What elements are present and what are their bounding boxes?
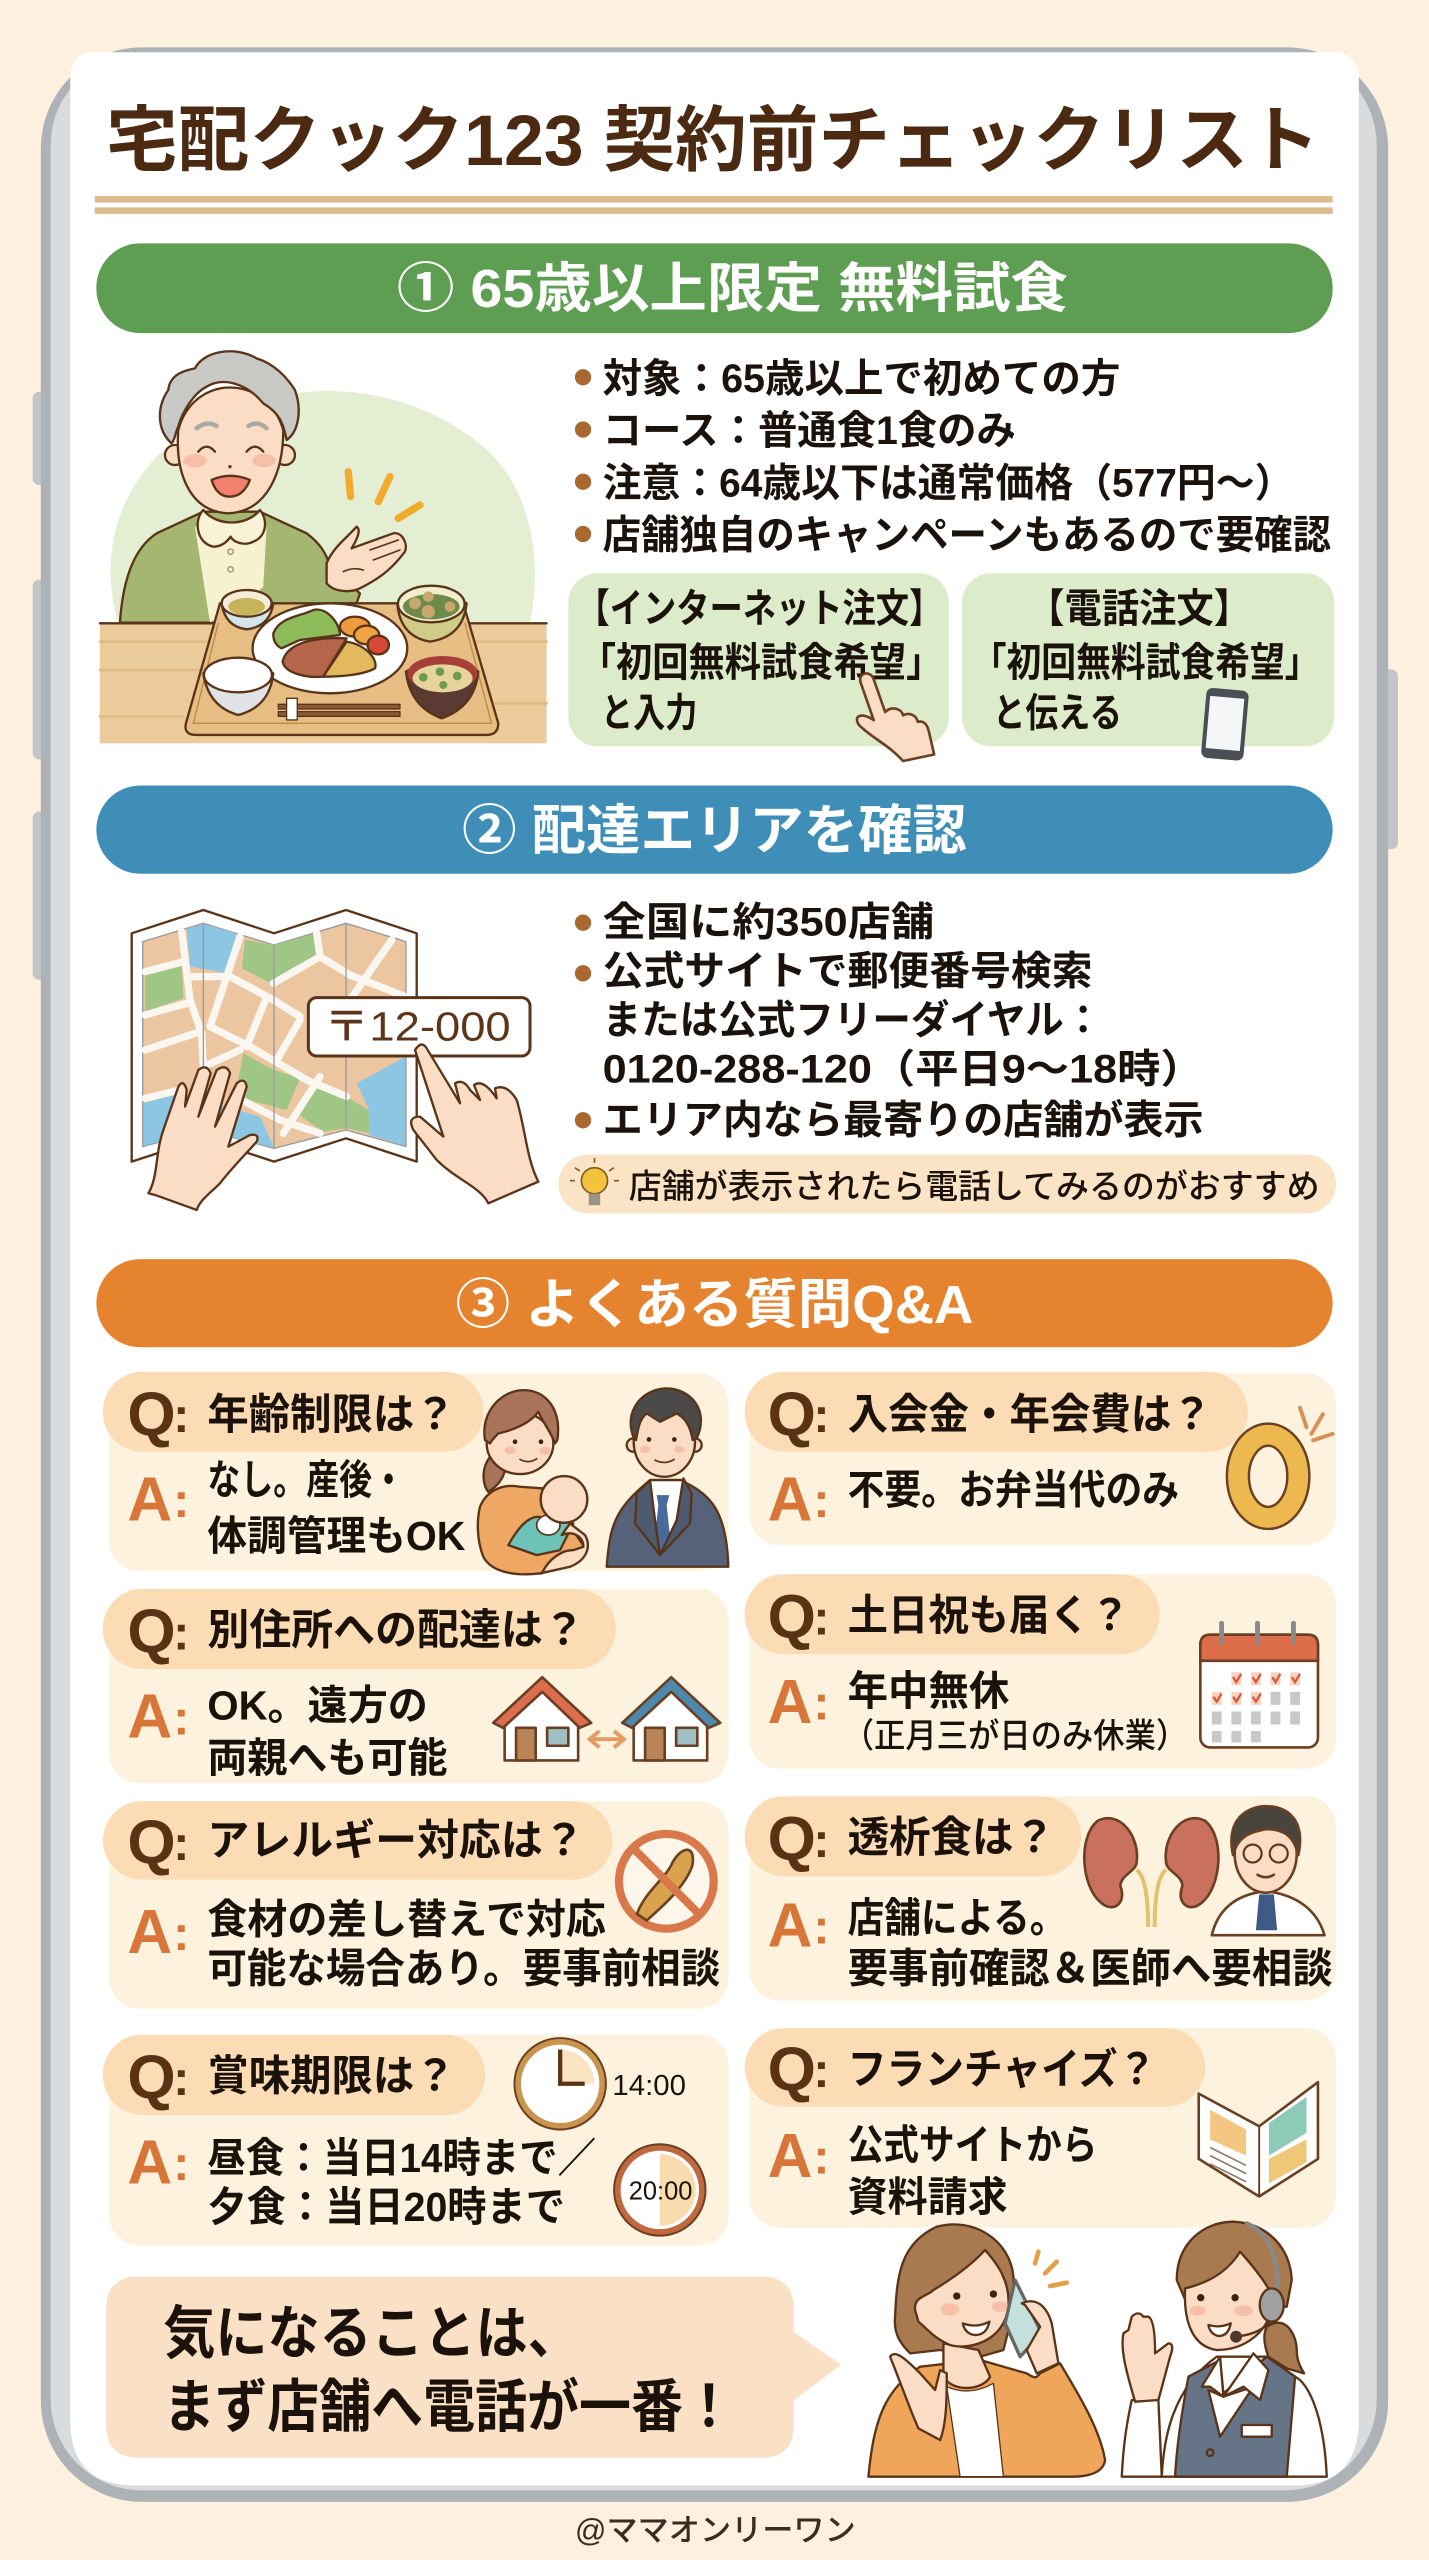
illustration: map with postal code search — [132, 910, 538, 1210]
tip pill: 店舗が表示されたら電話してみるのがおすすめ — [629, 1169, 1320, 1206]
QA card: other address: 両親へも可能 — [207, 1735, 447, 1781]
internet order box: と入力 — [601, 692, 697, 736]
callout speech bubble — [106, 2276, 841, 2458]
QA card: age limit — [103, 1372, 728, 1574]
QA card: weekends: Q — [768, 1583, 816, 1652]
QA card: fees: 入会金・年会費は？ — [848, 1391, 1212, 1438]
icon: light bulb — [570, 1158, 619, 1205]
tip pill — [559, 1155, 1336, 1213]
QA card: weekends: A — [768, 1668, 812, 1737]
phone order box: と伝える — [993, 692, 1122, 736]
section 3 header — [96, 1259, 1333, 1347]
miso soup — [406, 656, 478, 718]
section 1 bullets: 注意：64歳以下は通常価格（577円～） — [603, 461, 1293, 505]
callout speech bubble: 気になることは、 — [163, 2302, 580, 2366]
QA card: allergy — [103, 1801, 728, 2009]
QA card: allergy: Q — [127, 1808, 176, 1877]
map water and parks — [143, 924, 405, 1147]
internet order box: 「初回無料試食希望」 — [580, 641, 942, 685]
footer credit: @ママオンリーワン — [575, 2513, 856, 2548]
phone order box — [962, 573, 1334, 761]
QA card: age limit: Q — [127, 1380, 176, 1449]
QA card: expiry: 昼食：当日14時まで／ — [207, 2135, 596, 2181]
QA card: dialysis: : — [813, 1814, 830, 1868]
chopsticks — [278, 698, 400, 720]
QA card: fees: 不要。お弁当代のみ — [848, 1467, 1179, 1513]
QA card: dialysis: 要事前確認＆医師へ要相談 — [848, 1946, 1333, 1992]
QA card: weekends: : — [813, 1677, 830, 1731]
QA card: other address: : — [173, 1691, 189, 1745]
QA card: other address: 別住所への配達は？ — [207, 1607, 585, 1654]
icon: clock 14:00 — [514, 2038, 686, 2130]
woman — [120, 351, 360, 623]
table — [100, 623, 547, 743]
icon: mother and baby — [478, 1390, 588, 1574]
QA card: franchise: : — [813, 2044, 830, 2098]
QA card: fees: Q — [768, 1380, 816, 1449]
icon: brochure — [1199, 2082, 1318, 2196]
section 1 bullets: コース：普通食1食のみ — [603, 409, 1016, 453]
illustration: call center operator — [1122, 2222, 1327, 2477]
QA card: allergy: : — [173, 1907, 189, 1961]
QA card: fees: A — [768, 1465, 812, 1534]
QA card: weekends — [745, 1574, 1336, 1769]
QA card: franchise: Q — [768, 2035, 816, 2104]
section 3 header: ③ よくある質問Q&A — [456, 1275, 973, 1335]
gesture hand — [327, 527, 406, 591]
QA card: age limit: 体調管理もOK — [207, 1513, 466, 1559]
QA card: dialysis: 透析食は？ — [848, 1814, 1055, 1861]
plate with hamburger — [253, 603, 407, 693]
section 2 header: ② 配達エリアを確認 — [462, 801, 967, 861]
section 2 bullets: 公式サイトで郵便番号検索 — [603, 950, 1093, 994]
QA card: expiry: : — [173, 2052, 189, 2106]
QA card: expiry: 賞味期限は？ — [207, 2052, 456, 2099]
icon: clock 20:00: 20:00 — [629, 2176, 692, 2206]
section 2 header — [96, 786, 1333, 874]
section 1 header: ① 65歳以上限定 無料試食 — [397, 259, 1068, 319]
QA card: weekends: 土日祝も届く？ — [848, 1592, 1130, 1639]
QA card: other address: Q — [127, 1598, 176, 1667]
QA card: weekends: 年中無休 — [848, 1668, 1009, 1714]
icon: calendar — [1200, 1623, 1318, 1747]
QA card: expiry: A — [127, 2128, 172, 2197]
section 1 header — [96, 243, 1333, 333]
QA card: other address: : — [173, 1606, 189, 1660]
postal tag — [308, 998, 530, 1056]
section 2 bullets — [575, 901, 1204, 1142]
green bowl — [397, 586, 467, 642]
QA card: age limit: : — [173, 1474, 189, 1528]
QA card: allergy: A — [127, 1898, 172, 1967]
icon: kidneys — [1084, 1818, 1218, 1927]
QA card: dialysis: : — [813, 1900, 830, 1954]
icon: two houses — [493, 1677, 720, 1760]
right hand — [411, 1045, 538, 1203]
rice bowl — [203, 658, 273, 715]
internet order box: 【インターネット注文】 — [576, 587, 942, 631]
QA card: franchise: : — [813, 2131, 830, 2185]
QA card: allergy: 可能な場合あり。要事前相談 — [207, 1946, 720, 1992]
section 2 bullets: 0120-288-120（平日9～18時） — [603, 1048, 1204, 1092]
QA card: weekends: : — [813, 1592, 830, 1646]
icon: zero — [1238, 1408, 1333, 1518]
callout speech bubble: まず店舗へ電話が一番！ — [163, 2376, 735, 2440]
sparkle — [348, 472, 351, 497]
QA card: age limit: 年齢制限は？ — [207, 1391, 456, 1438]
QA card: other address: A — [127, 1683, 172, 1752]
section 2 bullets: または公式フリーダイヤル： — [603, 999, 1102, 1043]
QA card: expiry: 夕食：当日20時まで — [207, 2184, 565, 2230]
tray — [186, 603, 498, 735]
QA card: age limit: なし。産後・ — [207, 1457, 405, 1503]
QA card: fees: : — [813, 1474, 830, 1528]
QA card: expiry: : — [173, 2137, 189, 2191]
QA card: franchise: 資料請求 — [848, 2174, 1008, 2220]
section 1 bullets: 対象：65歳以上で初めての方 — [603, 357, 1120, 401]
QA card: franchise: 公式サイトから — [848, 2122, 1097, 2168]
icon: clock 20:00 — [614, 2144, 706, 2236]
QA card: other address — [103, 1589, 728, 1783]
QA card: dialysis: 店舗による。 — [848, 1895, 1066, 1941]
QA card: fees — [745, 1372, 1336, 1545]
section 1 bullets: 店舗独自のキャンペーンもあるので要確認 — [603, 514, 1331, 558]
QA card: franchise: A — [768, 2122, 812, 2191]
phone order box: 「初回無料試食希望」 — [972, 641, 1320, 685]
QA card: age limit: A — [127, 1465, 172, 1534]
postal tag: 〒12-000 — [324, 1004, 511, 1050]
icon: doctor — [1212, 1806, 1324, 1935]
section 2 bullets: 全国に約350店舗 — [603, 901, 934, 945]
QA card: weekends: （正月三が日のみ休業） — [843, 1717, 1187, 1755]
internet order box — [568, 573, 949, 761]
illustration: elderly woman with meal tray — [100, 351, 547, 743]
illustration: customer on the phone — [868, 2224, 1105, 2477]
title — [95, 101, 1333, 214]
section 1 bullets — [575, 357, 1331, 558]
QA card: franchise — [745, 2028, 1336, 2228]
QA card: age limit: : — [173, 1389, 189, 1443]
QA card: other address: OK。遠方の — [207, 1683, 428, 1729]
left hand — [148, 1067, 258, 1210]
QA card: dialysis: Q — [768, 1805, 816, 1874]
icon: clock 14:00: 14:00 — [612, 2070, 686, 2102]
QA card: franchise: フランチャイズ？ — [848, 2046, 1156, 2093]
icon: no allergen — [619, 1834, 714, 1929]
title: 宅配クック123 契約前チェックリスト — [106, 101, 1320, 181]
icon: pointing hand — [857, 673, 934, 761]
QA card: dialysis — [745, 1796, 1336, 2001]
QA card: allergy: : — [173, 1817, 189, 1871]
side dish — [222, 590, 273, 629]
QA card: expiry — [103, 2035, 728, 2245]
QA card: allergy: 食材の差し替えで対応 — [207, 1897, 606, 1943]
icon: smartphone — [1201, 687, 1249, 761]
QA card: expiry: Q — [127, 2043, 176, 2112]
QA card: allergy: アレルギー対応は？ — [207, 1817, 585, 1864]
QA card: dialysis: A — [768, 1892, 812, 1961]
section 2 bullets: エリア内なら最寄りの店舗が表示 — [603, 1098, 1204, 1142]
QA card: fees: : — [813, 1389, 830, 1443]
icon: man in suit — [607, 1388, 728, 1567]
phone order box: 【電話注文】 — [1027, 587, 1251, 631]
